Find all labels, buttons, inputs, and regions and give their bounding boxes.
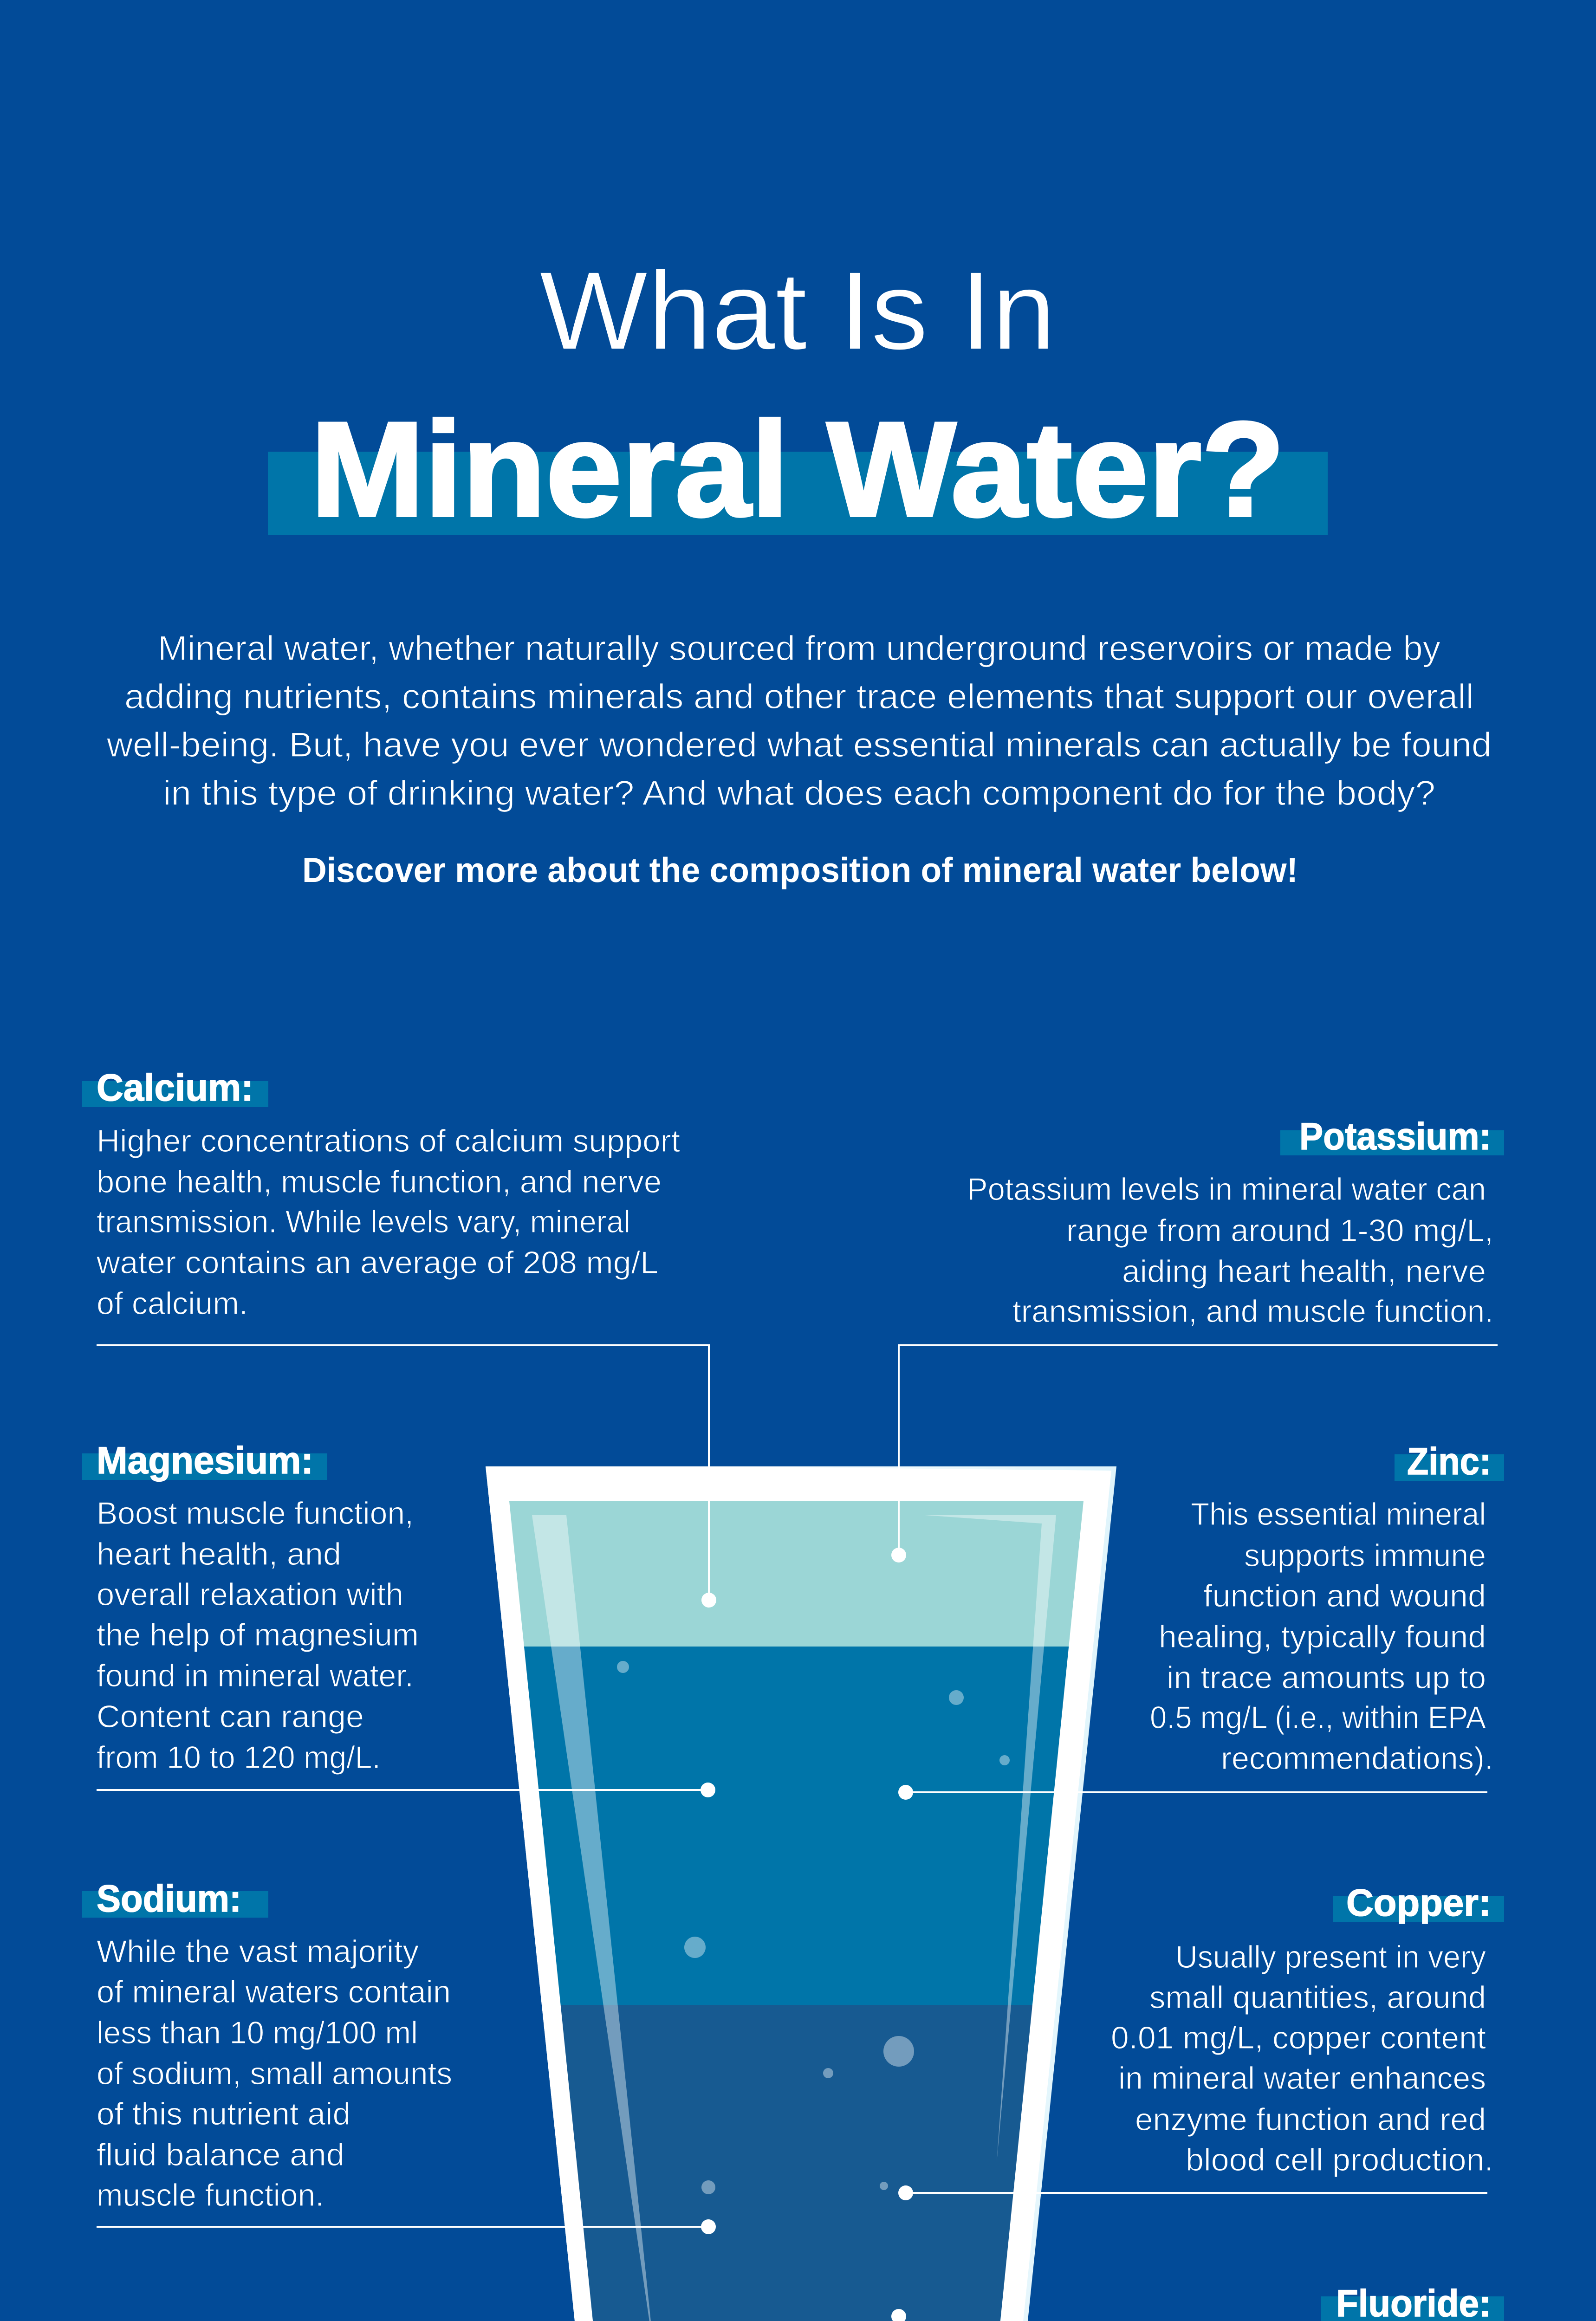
panel: zinc: in trace amounts up to [1167,1660,1486,1695]
panel: calcium: transmission. While levels vary, mineral [97,1204,630,1239]
title: Mineral Water? with highlight bar: Mineral Water? [311,394,1285,545]
panel: zinc: recommendations). [1221,1741,1493,1776]
panel: copper: Usually present in very [1175,1939,1486,1975]
water layers [487,1501,1109,2321]
panel: potassium: Potassium: [1299,1115,1491,1158]
panel: copper: in mineral water enhances [1118,2061,1486,2096]
panel: sodium: of mineral waters contain [97,1974,451,2010]
panel: sodium: fluid balance and [97,2137,344,2172]
panel: calcium [82,1067,716,1608]
panel: sodium: of this nutrient aid [97,2096,350,2132]
panel: magnesium: heart health, and [97,1537,341,1572]
right glass highlight [925,1515,1056,2162]
panel: sodium: of sodium, small amounts [97,2056,452,2091]
panel: sodium [82,1878,716,2234]
panel: calcium: Higher concentrations of calcium support [97,1123,680,1159]
intro paragraph [106,629,1492,812]
panel: sodium: muscle function. [97,2178,324,2213]
panel: sodium: While the vast majority [97,1934,419,1969]
panel: magnesium: Boost muscle function, [97,1496,414,1531]
panel: zinc: This essential mineral [1191,1497,1486,1532]
panel: potassium [891,1115,1504,1562]
left glass highlight [532,1515,655,2321]
panel: copper: Copper: [1346,1882,1491,1924]
bubbles [617,1661,1010,2194]
panel: potassium: transmission, and muscle function. [1012,1294,1493,1329]
panel: magnesium: the help of magnesium [97,1617,419,1653]
panel: zinc [898,1440,1504,1800]
panel: magnesium [82,1439,715,1797]
panel: zinc: 0.5 mg/L (i.e., within EPA [1150,1700,1486,1735]
panel: copper: small quantities, around [1149,1980,1486,2015]
title: What Is In: What Is In [539,248,1056,373]
panel: zinc: supports immune [1244,1538,1486,1573]
panel: zinc: healing, typically found [1159,1619,1486,1654]
panel: copper [898,1882,1504,2200]
panel: sodium: Sodium: [97,1878,241,1920]
panel: copper: 0.01 mg/L, copper content [1111,2020,1486,2055]
intro paragraph: in this type of drinking water? And what does each component do for the body? [163,773,1435,812]
panel: fluoride [891,2282,1504,2321]
panel: calcium: bone health, muscle function, and nerve [97,1164,662,1199]
panel: copper: blood cell production. [1186,2142,1493,2178]
panel: zinc: Zinc: [1407,1440,1491,1483]
panel: potassium: range from around 1-30 mg/L, [1066,1213,1493,1248]
intro paragraph: Mineral water, whether naturally sourced from underground reservoirs or made by [158,629,1440,668]
panel: magnesium: Content can range [97,1699,364,1734]
panel: magnesium: overall relaxation with [97,1577,403,1612]
panel: magnesium: found in mineral water. [97,1658,414,1693]
glass pale edge [486,1466,1116,2321]
glass illustration [486,1466,1116,2321]
panel: copper: enzyme function and red [1135,2102,1486,2137]
panel: zinc: function and wound [1203,1578,1486,1614]
panel: calcium: water contains an average of 208 mg/L [96,1245,658,1280]
panel: potassium: Potassium levels in mineral water can [967,1172,1486,1207]
panel: magnesium: Magnesium: [97,1439,313,1482]
intro call to action: Discover more about the composition of mineral water below! [302,850,1298,889]
panel: sodium: less than 10 mg/100 ml [97,2015,418,2050]
panel: calcium: of calcium. [97,1286,248,1321]
glass body [486,1466,1111,2321]
panel: calcium: Calcium: [97,1067,253,1109]
intro paragraph: well-being. But, have you ever wondered what essential minerals can actually be found [106,725,1492,764]
panel: magnesium: from 10 to 120 mg/L. [97,1740,381,1775]
panel: potassium: aiding heart health, nerve [1122,1254,1486,1289]
intro paragraph: adding nutrients, contains minerals and other trace elements that support our overall [124,677,1474,716]
